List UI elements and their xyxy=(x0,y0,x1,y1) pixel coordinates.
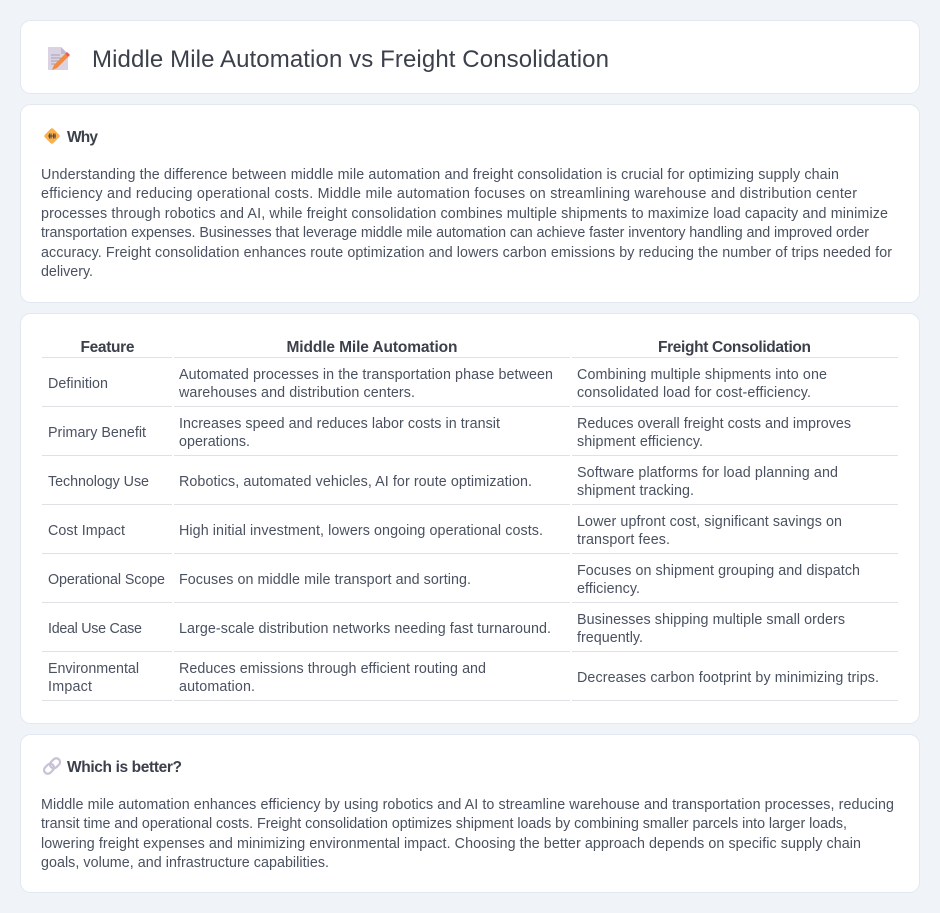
row: technology use: Robotics, automated vehicles, AI for route optimization. xyxy=(179,474,532,490)
row: cost impact: High initial investment, lowers ongoing operational costs. xyxy=(179,523,543,539)
text block: why xyxy=(41,167,892,280)
text block: which is better: Middle mile automation enhances efficiency by using robotics and AI to streamline warehouse and transportation processes, reducing xyxy=(41,797,894,813)
row: definition: warehouses and distribution centers. xyxy=(178,385,415,401)
row: primary benefit: operations. xyxy=(179,434,250,450)
row: technology use: shipment tracking. xyxy=(577,483,694,499)
panel: comparison table xyxy=(20,314,920,724)
panel: why xyxy=(20,104,920,302)
row: definition: Definition xyxy=(48,376,108,392)
text block: which is better: transit time and operational costs. Freight consolidation optimizes shipment loads by combining smaller parcels into larger loads, xyxy=(41,816,847,832)
table rules xyxy=(42,357,898,701)
text block: why: delivery. xyxy=(41,264,93,280)
row: environmental impact xyxy=(48,661,879,695)
row: definition xyxy=(48,367,827,401)
row: operational scope: Focuses on middle mile transport and sorting. xyxy=(179,572,471,588)
text block: why: Understanding the difference between middle mile automation and freight consolidation is crucial for optimizing supply chain xyxy=(41,167,839,183)
icon: link xyxy=(42,757,62,775)
text block: why: transportation expenses. Businesses that leverage middle mile automation can achieve faster inventory handling and improved order xyxy=(41,225,869,241)
row: environmental impact: Reduces emissions through efficient routing and xyxy=(179,661,486,677)
title: Middle Mile Automation vs Freight Consolidation xyxy=(92,46,609,73)
row: ideal use case: Businesses shipping multiple small orders xyxy=(577,612,845,628)
row: environmental impact: Environmental xyxy=(48,661,139,677)
row: primary benefit: Increases speed and reduces labor costs in transit xyxy=(179,416,500,432)
row: ideal use case: frequently. xyxy=(577,630,643,646)
table header xyxy=(80,339,811,356)
row: ideal use case: Ideal Use Case xyxy=(48,621,142,637)
text block: which is better: lowering freight expenses and minimizing environmental impact. Choosing the better approach depends on specific supply chain xyxy=(41,836,861,852)
row: cost impact: transport fees. xyxy=(577,532,670,548)
row: definition: Automated processes in the transportation phase between xyxy=(179,367,553,383)
text block: why: efficiency and reducing operational costs. Middle mile automation focuses on streamlining warehouse and distribution center xyxy=(41,186,857,202)
table header: Feature xyxy=(80,339,135,356)
table header: Middle Mile Automation xyxy=(286,339,458,356)
row: primary benefit: shipment efficiency. xyxy=(577,434,703,450)
icon: document with pencil xyxy=(48,47,70,70)
row: primary benefit xyxy=(48,416,851,450)
row: primary benefit: Reduces overall freight costs and improves xyxy=(577,416,851,432)
heading: why: Why xyxy=(67,129,98,146)
row: environmental impact: Impact xyxy=(48,679,92,695)
row: environmental impact: automation. xyxy=(179,679,255,695)
row: technology use xyxy=(48,465,838,499)
row: ideal use case: Large-scale distribution networks needing fast turnaround. xyxy=(179,621,551,637)
heading: which is better: Which is better? xyxy=(67,759,182,776)
text block: which is better: goals, volume, and infrastructure capabilities. xyxy=(41,855,329,871)
table header: Freight Consolidation xyxy=(658,339,811,356)
row: ideal use case xyxy=(48,612,845,646)
panel: which is better xyxy=(20,734,920,892)
row: operational scope xyxy=(48,563,860,597)
text block: why: accuracy. Freight consolidation enhances route optimization and lowers carbon emissions by reducing the number of trips needed for xyxy=(41,245,892,261)
text block: which is better xyxy=(41,797,894,871)
row: cost impact: Cost Impact xyxy=(48,523,125,539)
row: definition: Combining multiple shipments into one xyxy=(577,367,827,383)
panel: header xyxy=(20,20,920,94)
row: technology use: Software platforms for load planning and xyxy=(577,465,838,481)
row: primary benefit: Primary Benefit xyxy=(48,425,146,441)
row: cost impact xyxy=(48,514,842,548)
row: environmental impact: Decreases carbon footprint by minimizing trips. xyxy=(577,670,879,686)
row: definition: consolidated load for cost-efficiency. xyxy=(577,385,811,401)
row: operational scope: Focuses on shipment grouping and dispatch xyxy=(577,563,860,579)
row: cost impact: Lower upfront cost, significant savings on xyxy=(577,514,842,530)
row: technology use: Technology Use xyxy=(48,474,149,490)
row: operational scope: efficiency. xyxy=(577,581,640,597)
text block: why: processes through robotics and AI, while freight consolidation combines multiple shipments to maximize load capacity and minimize xyxy=(41,206,888,222)
row: operational scope: Operational Scope xyxy=(48,572,165,588)
icon: diamond sign xyxy=(44,128,60,144)
